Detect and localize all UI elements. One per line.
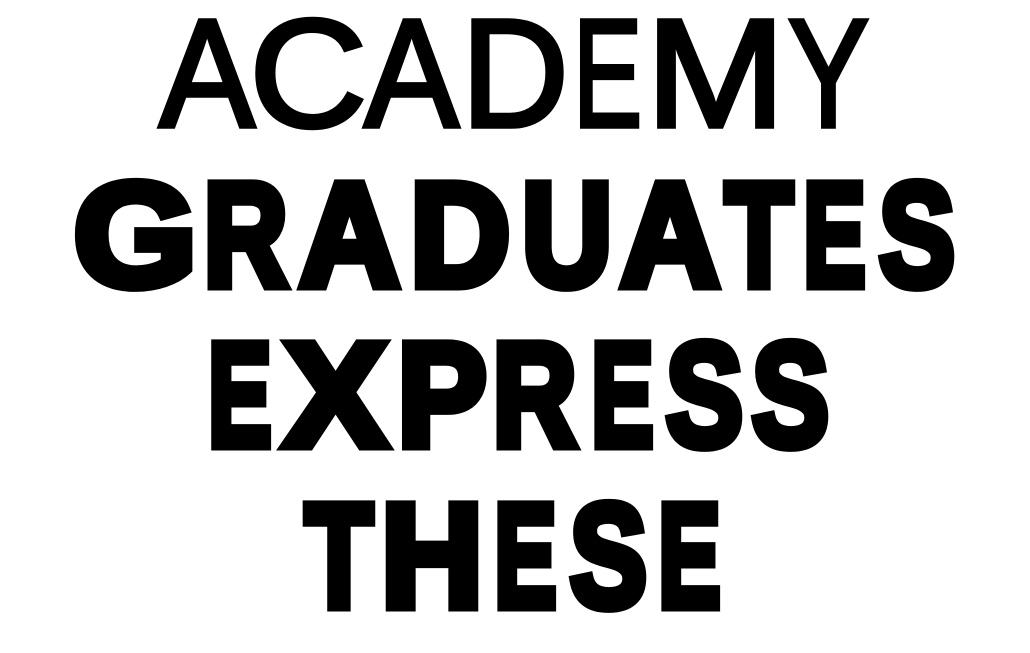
title line: THESE: E — [494, 474, 557, 638]
title line: EXPRESS: E — [208, 314, 272, 478]
title line: EXPRESS: R — [493, 314, 577, 478]
title line: GRADUATES: T — [725, 154, 793, 318]
title line: GRADUATES: G — [74, 154, 197, 318]
title line: GRADUATES: R — [204, 154, 288, 318]
title line: EXPRESS: S — [752, 314, 829, 478]
title line: GRADUATES: U — [522, 154, 612, 318]
title line: GRADUATES: A — [300, 154, 400, 318]
title line: THESE: E — [658, 474, 721, 638]
title line: GRADUATES: D — [410, 154, 510, 318]
title line: EXPRESS: P — [398, 314, 487, 478]
title line: GRADUATES: A — [620, 154, 720, 318]
title line: EXPRESS: X — [284, 314, 387, 478]
title line: GRADUATES: E — [803, 154, 866, 318]
title line: GRADUATES: S — [879, 154, 955, 318]
title line: EXPRESS: S — [666, 314, 743, 478]
title line: THESE: T — [305, 474, 373, 638]
title line: THESE: S — [570, 474, 647, 638]
title line: THESE: H — [381, 474, 483, 638]
title line: EXPRESS: E — [591, 314, 654, 478]
